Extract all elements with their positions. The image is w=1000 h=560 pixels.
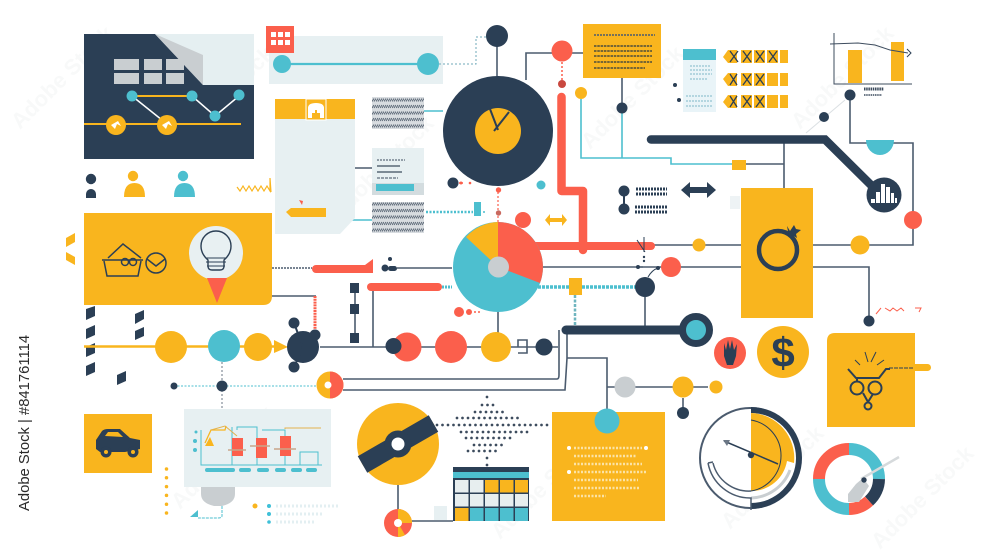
yellow nodes <box>672 376 722 398</box>
bullet dots <box>673 83 681 102</box>
chevron marks <box>66 233 75 265</box>
yellow node <box>692 238 706 252</box>
panel: car tile <box>84 414 152 473</box>
yellow tag <box>569 278 582 295</box>
process row <box>84 318 320 372</box>
red dot link <box>454 307 480 317</box>
icon: envelope <box>146 253 166 273</box>
red node <box>435 331 467 363</box>
icon: calendar badge <box>266 26 294 53</box>
navy node with arrow <box>635 256 660 297</box>
red node with navy overlap <box>386 332 422 362</box>
donut chart <box>819 449 899 509</box>
teal node on card <box>594 408 620 434</box>
panel: teal connector bar <box>269 36 443 84</box>
dotted node row <box>170 362 316 408</box>
watermark: Adobe Stock <box>716 420 829 534</box>
panel: yellow glasses card <box>827 333 931 427</box>
yellow text card <box>583 24 661 78</box>
hub clock <box>443 76 553 186</box>
red bar <box>367 283 442 291</box>
yellow dotted column <box>165 469 168 514</box>
yellow disc with navy band <box>357 403 439 485</box>
teal dashed link with tag <box>426 202 485 216</box>
connector lines <box>272 36 913 521</box>
top node <box>486 25 508 47</box>
dotted connector to top node <box>439 37 488 64</box>
dot diamond <box>437 397 550 466</box>
red dotted link <box>496 187 501 222</box>
navy node <box>677 407 689 419</box>
teal dot <box>536 180 546 190</box>
yellow text card bottom <box>552 412 665 521</box>
navy double arrow <box>681 182 716 198</box>
yellow node <box>481 332 511 362</box>
watermark: Adobe Stock <box>786 20 899 134</box>
panel: flow chart card <box>184 409 331 487</box>
red node <box>661 257 681 277</box>
panel: dark process card <box>84 34 254 159</box>
calendar table <box>453 467 529 521</box>
watermark: Adobe Stock <box>486 430 599 544</box>
icon: dollar badge: $ <box>771 329 795 376</box>
yellow connector tag <box>732 160 746 170</box>
red bar with tab <box>272 259 373 273</box>
panel: hatched text box bottom <box>372 202 424 233</box>
arrow ticks on red line <box>637 237 645 252</box>
watermark: Adobe Stock <box>326 110 439 224</box>
icon: person navy <box>86 174 96 198</box>
bullet list faint <box>252 504 340 524</box>
small connector icon <box>382 257 397 272</box>
thick navy bar with bar gauge <box>651 140 902 212</box>
small yellow node <box>575 87 587 99</box>
navy bar with teal knob <box>566 316 710 344</box>
side doc <box>683 49 716 112</box>
icon: person yellow <box>124 171 145 197</box>
yellow double arrow <box>545 214 567 226</box>
watermark: Adobe Stock <box>576 40 689 154</box>
panel: form card <box>372 148 424 195</box>
red node right <box>904 211 922 229</box>
grey dial needle <box>848 457 899 502</box>
icon: person teal <box>174 171 195 197</box>
red dashed riser <box>314 296 316 330</box>
dark squares chain <box>350 283 359 343</box>
navy node <box>536 338 552 356</box>
teal half circle <box>866 140 894 155</box>
node <box>616 102 628 114</box>
teal dashes vertical <box>574 295 576 325</box>
grey bowl with teal arrow <box>190 487 235 518</box>
red dotted link <box>558 62 566 88</box>
teal dashed link <box>538 285 636 289</box>
tag rows <box>723 50 788 108</box>
pie chart <box>453 222 543 312</box>
split node <box>316 372 344 398</box>
nodes and faint link <box>806 90 856 133</box>
red node <box>515 212 531 228</box>
icon: basket <box>102 244 143 276</box>
zigzag line <box>237 178 271 192</box>
navy node <box>864 316 874 326</box>
panel: yellow idea card <box>84 213 272 305</box>
icon: light bulb pin <box>189 226 243 303</box>
thick red pipe <box>530 97 651 250</box>
watermark: Adobe Stock <box>866 440 979 554</box>
small ring pie <box>384 509 412 537</box>
small node with red dots <box>448 178 471 188</box>
red squiggle note <box>876 308 921 314</box>
yellow node right <box>850 236 870 254</box>
teal dash <box>442 286 452 288</box>
watermark: Adobe Stock <box>166 40 279 154</box>
note tile <box>730 196 740 209</box>
grey node <box>614 376 636 398</box>
panel: hatched text box top <box>372 97 424 129</box>
yellow ring card <box>741 188 813 318</box>
navy parallelogram marks <box>86 306 144 385</box>
icon: red hand badge <box>714 337 746 369</box>
icon: dollar badge <box>757 326 809 378</box>
light square <box>434 506 447 520</box>
gauge dial <box>700 407 802 510</box>
node list <box>618 186 667 214</box>
watermark: Adobe Stock <box>6 20 119 134</box>
source caption: Adobe Stock | #841761114 <box>17 335 33 511</box>
mini bar chart <box>830 33 912 95</box>
red node <box>552 40 572 62</box>
watermark: Adobe Stock <box>166 400 279 514</box>
panel: document sheet <box>275 99 355 234</box>
